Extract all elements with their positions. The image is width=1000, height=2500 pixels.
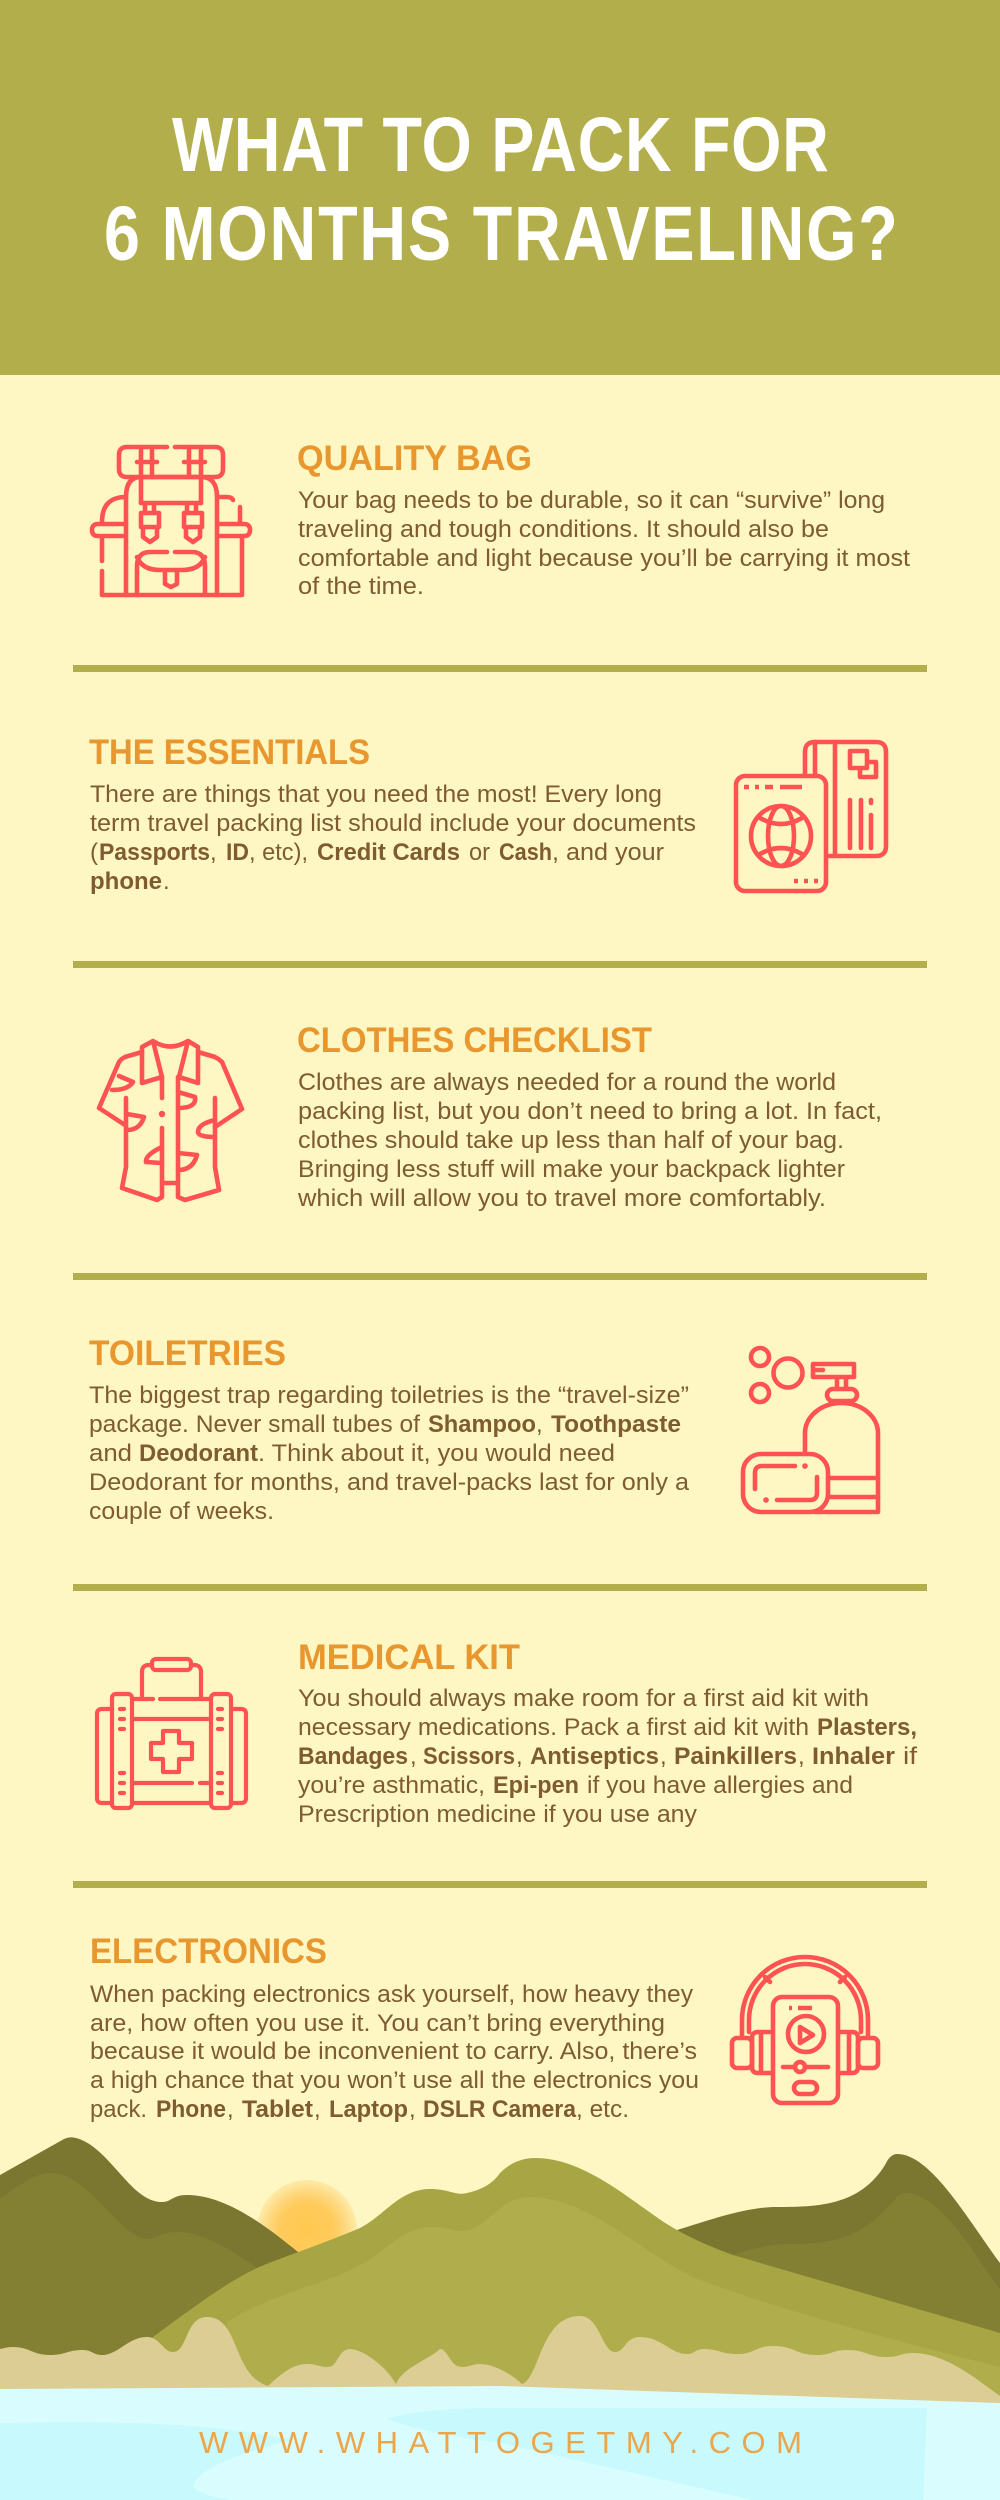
text block: necessary medications. Pack a first aid kit with (298, 1714, 809, 1741)
panel: quality bag (92, 439, 910, 600)
text block: or (469, 839, 490, 866)
text block: term travel packing list should include your documents (90, 810, 696, 837)
text block (89, 1382, 690, 1525)
icon: backpack (92, 447, 250, 595)
heading: MEDICAL KIT (298, 1638, 520, 1677)
text block: , (798, 1743, 805, 1770)
title: 6 MONTHS TRAVELING? (104, 192, 898, 277)
text block: , (516, 1743, 523, 1770)
text block: Bandages (298, 1743, 408, 1770)
text block: traveling and tough conditions. It should also be (298, 516, 829, 543)
text block: of the time. (298, 573, 424, 600)
text block: Plasters, (817, 1714, 917, 1741)
text block: Deodorant (139, 1440, 258, 1467)
text block: a high chance that you won’t use all the electronics you (90, 2067, 699, 2094)
text block (90, 1981, 699, 2123)
title: WHAT TO PACK FOR (172, 103, 829, 188)
icon: passport and card (736, 742, 886, 891)
text block: Epi-pen (493, 1772, 579, 1799)
heading: CLOTHES CHECKLIST (297, 1021, 652, 1060)
heading: THE ESSENTIALS (89, 733, 370, 772)
text block: DSLR Camera (423, 2096, 577, 2123)
text block: Passports (99, 839, 210, 866)
heading: TOILETRIES (89, 1334, 286, 1373)
text block: , etc. (576, 2096, 629, 2123)
text block: Antiseptics (530, 1743, 659, 1770)
text block: Tablet (242, 2096, 313, 2123)
text block: , etc), (249, 839, 308, 866)
text block: Bringing less stuff will make your backpack lighter (298, 1156, 845, 1183)
text block: Laptop (329, 2096, 408, 2123)
text block: You should always make room for a first aid kit with (298, 1685, 869, 1712)
text block: Painkillers (674, 1743, 797, 1770)
text block: comfortable and light because you’ll be carrying it most (298, 545, 910, 572)
text block: if you have allergies and (587, 1772, 853, 1799)
text block: , (409, 2096, 416, 2123)
text block: Cash (499, 839, 552, 866)
icon: first aid kit (97, 1659, 246, 1808)
text block: are, how often you use it. You can’t bring everything (90, 2010, 665, 2037)
text block: Deodorant for months, and travel-packs last for only a (89, 1469, 690, 1496)
heading: QUALITY BAG (297, 439, 532, 478)
website footer: WWW.WHATTOGETMY.COM (199, 2425, 802, 2460)
text block: ( (90, 839, 98, 866)
text block: phone (90, 868, 162, 895)
panel: toiletries (89, 1334, 878, 1525)
panel: electronics (90, 1932, 878, 2123)
text block: The biggest trap regarding toiletries is the “travel-size” (89, 1382, 689, 1409)
icon: soap and bottle (743, 1348, 878, 1512)
text block: , (536, 1411, 543, 1438)
text block: you’re asthmatic, (298, 1772, 485, 1799)
text block: and (89, 1440, 132, 1467)
text block: pack. (90, 2096, 147, 2123)
text block: , (410, 1743, 417, 1770)
title (104, 103, 898, 277)
text block: , (227, 2096, 234, 2123)
text block: if (903, 1743, 917, 1770)
icon: shirt (99, 1041, 242, 1200)
text block (90, 781, 696, 895)
text block (298, 487, 910, 600)
text block: There are things that you need the most! Every long (90, 781, 662, 808)
water (0, 2386, 1000, 2500)
text block: Credit Cards (317, 839, 460, 866)
text block: clothes should take up less than half of your bag. (298, 1127, 844, 1154)
text block: , (314, 2096, 321, 2123)
panel: medical kit (97, 1638, 917, 1828)
landscape illustration (0, 2137, 1000, 2500)
text block: , (210, 839, 217, 866)
text block: . Think about it, you would need (258, 1440, 615, 1467)
text block: , and your (552, 839, 664, 866)
text block: because it would be inconvenient to carry. Also, there’s (90, 2038, 697, 2065)
text block: Toothpaste (551, 1411, 681, 1438)
text block: Phone (156, 2096, 226, 2123)
text block: , (660, 1743, 667, 1770)
icon: phone with headphones (732, 1957, 878, 2103)
text block: Inhaler (812, 1743, 895, 1770)
heading: ELECTRONICS (90, 1932, 327, 1971)
text block: ID (226, 839, 249, 866)
text block: Clothes are always needed for a round the world (298, 1069, 836, 1096)
text block (298, 1685, 917, 1828)
text block: couple of weeks. (89, 1498, 274, 1525)
text block: packing list, but you don’t need to bring a lot. In fact, (298, 1098, 882, 1125)
text block: which will allow you to travel more comfortably. (297, 1185, 826, 1212)
text block (297, 1069, 882, 1212)
text block: Shampoo (428, 1411, 536, 1438)
text block: package. Never small tubes of (89, 1411, 420, 1438)
sun (257, 2180, 357, 2280)
text block: Your bag needs to be durable, so it can “survive” long (298, 487, 885, 514)
text block: When packing electronics ask yourself, how heavy they (90, 1981, 693, 2008)
text block: . (163, 868, 170, 895)
text block: Prescription medicine if you use any (298, 1801, 697, 1828)
text block: Scissors (423, 1743, 515, 1770)
header banner (0, 0, 1000, 375)
panel: clothes checklist (99, 1021, 882, 1212)
panel: the essentials (89, 733, 886, 895)
